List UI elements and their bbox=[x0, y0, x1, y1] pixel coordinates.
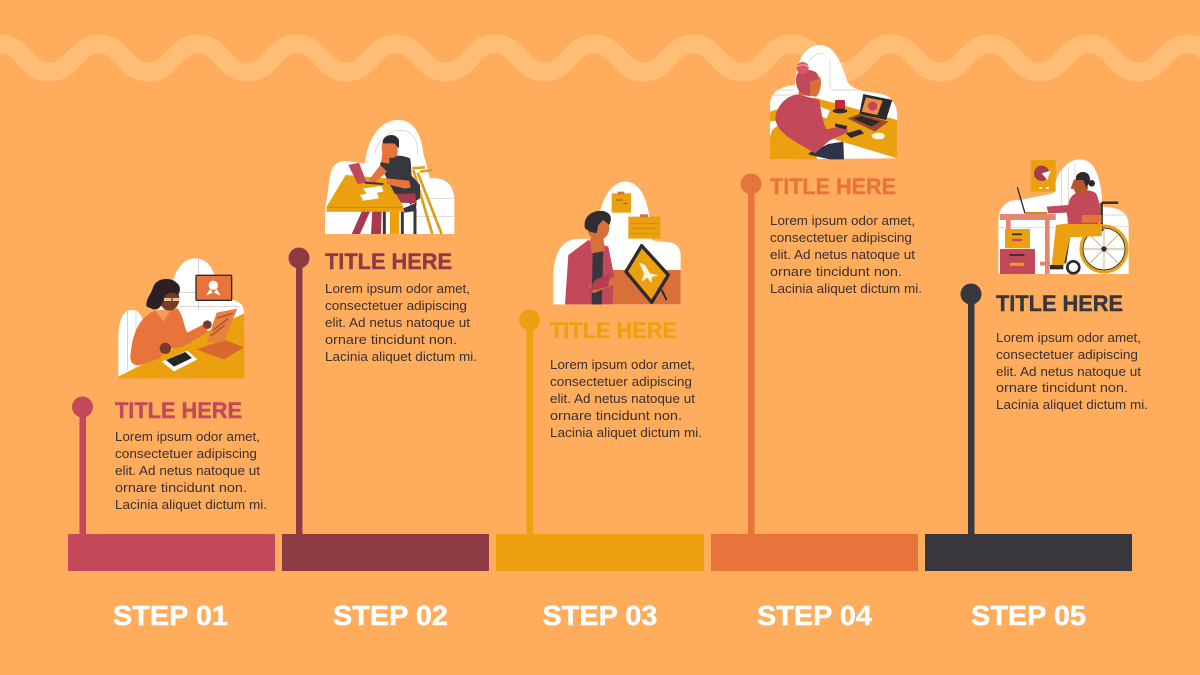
step 5 panel bbox=[925, 159, 1148, 631]
step 5 text block bbox=[996, 331, 1148, 412]
step 4 panel bbox=[711, 45, 922, 631]
step 2 stem and pin bbox=[288, 248, 310, 535]
step 3 text block: ornare tincidunt non. bbox=[550, 409, 682, 423]
step 3 text block: Lacinia aliquet dictum mi. bbox=[550, 426, 702, 440]
step 1 panel bbox=[68, 258, 275, 631]
step 5 text block: elit. Ad netus natoque ut bbox=[996, 365, 1142, 379]
step 1 text block: Lacinia aliquet dictum mi. bbox=[115, 498, 267, 512]
step 1 text block: ornare tincidunt non. bbox=[115, 481, 247, 495]
step 3 label: STEP 03 bbox=[542, 600, 658, 631]
step 5 label: STEP 05 bbox=[971, 600, 1086, 631]
step 3 bar bbox=[496, 534, 704, 571]
step 1 text block: elit. Ad netus natoque ut bbox=[115, 464, 261, 478]
step 5 text block: consectetuer adipiscing bbox=[996, 348, 1138, 362]
step 4 illustration: woman at laptop from behind bbox=[770, 45, 897, 159]
step 1 text block: Lorem ipsum odor amet, bbox=[115, 430, 260, 444]
step 2 text block: elit. Ad netus natoque ut bbox=[325, 316, 471, 330]
step 2 text block: Lorem ipsum odor amet, bbox=[325, 282, 470, 296]
step 2 text block: Lacinia aliquet dictum mi. bbox=[325, 350, 477, 364]
step 1 text block bbox=[115, 430, 267, 512]
step 3 text block: Lorem ipsum odor amet, bbox=[550, 358, 695, 372]
step 4 text block: elit. Ad netus natoque ut bbox=[770, 248, 916, 262]
step 5 text block: Lorem ipsum odor amet, bbox=[996, 331, 1141, 345]
step 2 illustration: man with laptop and crutches bbox=[325, 120, 454, 234]
step 2 text block: ornare tincidunt non. bbox=[325, 333, 457, 347]
step 5 text block: ornare tincidunt non. bbox=[996, 381, 1128, 395]
step 3 stem and pin bbox=[519, 310, 540, 535]
decorative wave band bbox=[0, 44, 1200, 72]
step 2 title: TITLE HERE bbox=[325, 249, 452, 274]
step 4 text block: Lorem ipsum odor amet, bbox=[770, 214, 915, 228]
step 2 text block bbox=[325, 282, 477, 364]
step 3 text block bbox=[550, 358, 702, 440]
step 4 label: STEP 04 bbox=[757, 600, 872, 631]
step 2 panel bbox=[282, 120, 489, 631]
step 2 text block: consectetuer adipiscing bbox=[325, 299, 467, 313]
step 4 text block bbox=[770, 214, 922, 296]
step 1 illustration: woman with calculator bbox=[118, 258, 245, 378]
step 1 title: TITLE HERE bbox=[115, 398, 242, 423]
step 5 title: TITLE HERE bbox=[996, 291, 1123, 316]
step 5 text block: Lacinia aliquet dictum mi. bbox=[996, 398, 1148, 412]
step 3 text block: elit. Ad netus natoque ut bbox=[550, 392, 696, 406]
step 4 text block: consectetuer adipiscing bbox=[770, 231, 912, 245]
step 3 illustration: man with tablet bbox=[553, 182, 681, 304]
step 4 title: TITLE HERE bbox=[770, 174, 896, 199]
step 3 text block: consectetuer adipiscing bbox=[550, 375, 692, 389]
step 1 text block: consectetuer adipiscing bbox=[115, 447, 257, 461]
step 2 label: STEP 02 bbox=[333, 600, 448, 631]
step 4 bar bbox=[711, 534, 918, 571]
step 5 bar bbox=[925, 534, 1132, 571]
step 4 text block: ornare tincidunt non. bbox=[770, 265, 902, 279]
step 4 stem and pin bbox=[740, 174, 762, 535]
step 2 bar bbox=[282, 534, 489, 571]
step 5 stem and pin bbox=[960, 284, 982, 535]
step 5 illustration: woman in wheelchair at desk bbox=[998, 159, 1129, 274]
step 1 stem and pin bbox=[72, 396, 93, 535]
step 3 title: TITLE HERE bbox=[550, 318, 677, 343]
step 3 panel bbox=[496, 182, 704, 631]
step 4 text block: Lacinia aliquet dictum mi. bbox=[770, 282, 922, 296]
step 1 label: STEP 01 bbox=[113, 600, 228, 631]
step 1 bar bbox=[68, 534, 275, 571]
